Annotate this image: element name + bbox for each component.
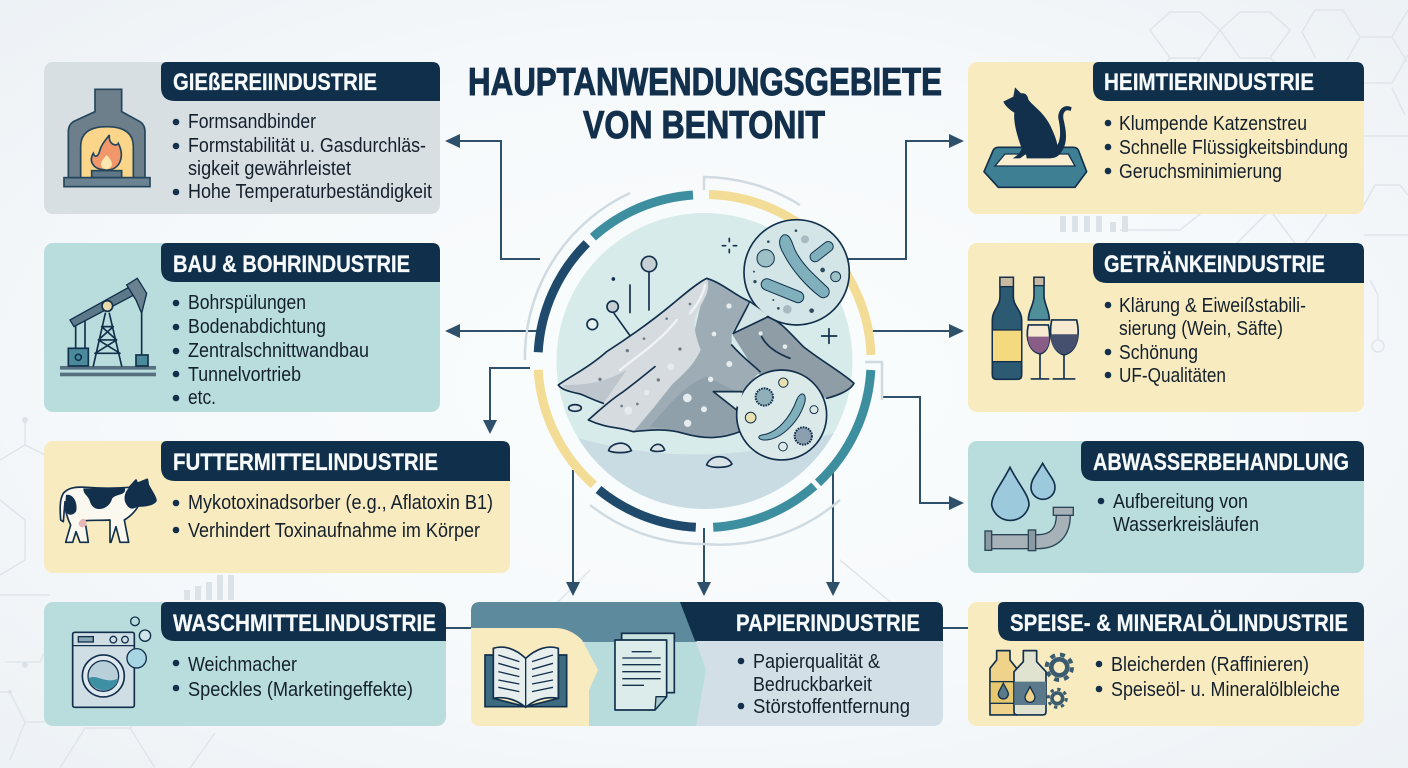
- heading: BAU & BOHRINDUSTRIE: [173, 251, 410, 278]
- text block: [173, 654, 413, 701]
- text block: Aufbereitung von: [1113, 491, 1248, 513]
- icon: cat on litter box: [984, 87, 1087, 187]
- bottom magnifier bubble: bacteria: [713, 370, 827, 460]
- heading: WASCHMITTELINDUSTRIE: [173, 610, 436, 637]
- text block: Verhindert Toxinaufnahme im Körper: [188, 520, 480, 542]
- heading: GETRÄNKEINDUSTRIE: [1104, 251, 1325, 278]
- text block: Klärung & Eiweißstabili-: [1119, 295, 1306, 317]
- heading: [1081, 441, 1364, 481]
- text block: Störstoffentfernung: [753, 696, 910, 718]
- title: HAUPTANWENDUNGSGEBIETE: [468, 61, 942, 104]
- rock fragments: [569, 405, 732, 467]
- text block: Klumpende Katzenstreu: [1119, 113, 1307, 135]
- disk: [556, 213, 852, 509]
- text block: [1098, 491, 1259, 536]
- heading: [161, 441, 510, 481]
- text block: Bohrspülungen: [188, 292, 306, 314]
- text block: Mykotoxinadsorber (e.g., Aflatoxin B1): [188, 492, 493, 514]
- panel: Gießereiindustrie: [44, 62, 440, 214]
- text block: Schnelle Flüssigkeitsbindung: [1119, 137, 1348, 159]
- text block: [1096, 654, 1340, 701]
- icon: wine bottles and glasses: [992, 277, 1078, 379]
- heading: [680, 602, 943, 641]
- heading: HEIMTIERINDUSTRIE: [1104, 69, 1314, 96]
- text block: Geruchsminimierung: [1119, 161, 1282, 183]
- icon: water drops and pipe: [985, 463, 1073, 551]
- panel: Waschmittelindustrie: [44, 602, 446, 726]
- heading: [998, 602, 1364, 641]
- ring segments: [538, 194, 871, 527]
- text block: [173, 292, 369, 409]
- heading: FUTTERMITTELINDUSTRIE: [173, 449, 438, 476]
- text block: Hohe Temperaturbeständigkeit: [188, 181, 432, 203]
- panel: Speise- & Mineralölindustrie: [968, 602, 1364, 726]
- text block: Speiseöl- u. Mineralölbleiche: [1111, 679, 1340, 701]
- text block: Tunnelvortrieb: [188, 364, 301, 386]
- icon: furnace: [64, 89, 150, 187]
- text block: [738, 651, 910, 718]
- panel: Heimtierindustrie: [968, 62, 1364, 214]
- panel: Papierindustrie: [471, 602, 943, 726]
- central illustration: bentonite with microbes: [525, 177, 882, 545]
- text block: Formsandbinder: [188, 111, 316, 133]
- text block: Schönung: [1119, 342, 1198, 364]
- heading: GIEßEREIINDUSTRIE: [173, 69, 377, 96]
- panel: Getränkeindustrie: [968, 243, 1364, 412]
- panel: Abwasserbehandlung: [968, 441, 1364, 573]
- text block: Zentralschnittwandbau: [188, 340, 369, 362]
- heading: [161, 62, 440, 101]
- text block: [173, 492, 493, 542]
- text block: Wasserkreisläufen: [1113, 514, 1259, 536]
- text block: [173, 111, 432, 203]
- icon: oil pump: [60, 278, 156, 376]
- heading: PAPIERINDUSTRIE: [736, 610, 920, 637]
- rock mound: [558, 278, 854, 438]
- heading: [161, 602, 446, 641]
- panel: Bau & Bohrindustrie: [44, 243, 440, 412]
- icon: cow: [60, 479, 156, 542]
- text block: Speckles (Marketingeffekte): [188, 679, 413, 701]
- connector arrows: [445, 134, 968, 628]
- heading: SPEISE- & MINERALÖLINDUSTRIE: [1010, 610, 1348, 637]
- text block: Bedruckbarkeit: [753, 674, 872, 696]
- top magnifier bubble: rod bacteria: [733, 220, 849, 333]
- text block: UF-Qualitäten: [1119, 365, 1226, 387]
- text block: [1105, 113, 1348, 183]
- heading: [1093, 62, 1364, 101]
- panel: Futtermittelindustrie: [44, 441, 510, 573]
- text block: sigkeit gewährleistet: [188, 158, 351, 180]
- heading: [1093, 243, 1364, 283]
- title: [468, 61, 942, 147]
- icon: oil bottles and gears: [990, 651, 1072, 715]
- heading: ABWASSERBEHANDLUNG: [1093, 449, 1349, 476]
- text block: Weichmacher: [188, 654, 297, 676]
- icon: paper sheets: [615, 633, 674, 710]
- text block: [1105, 295, 1306, 387]
- icon: open book: [485, 647, 567, 707]
- heading: [161, 243, 440, 282]
- text block: Bleicherden (Raffinieren): [1111, 654, 1309, 676]
- decorative molecule marks: [587, 238, 837, 343]
- text block: Papierqualität &: [753, 651, 881, 673]
- text block: sierung (Wein, Säfte): [1119, 318, 1283, 340]
- text block: Bodenabdichtung: [188, 316, 326, 338]
- title: VON BENTONIT: [583, 104, 825, 147]
- text block: Formstabilität u. Gasdurchläs-: [188, 135, 426, 157]
- text block: etc.: [188, 387, 216, 409]
- icon: washing machine: [73, 617, 151, 707]
